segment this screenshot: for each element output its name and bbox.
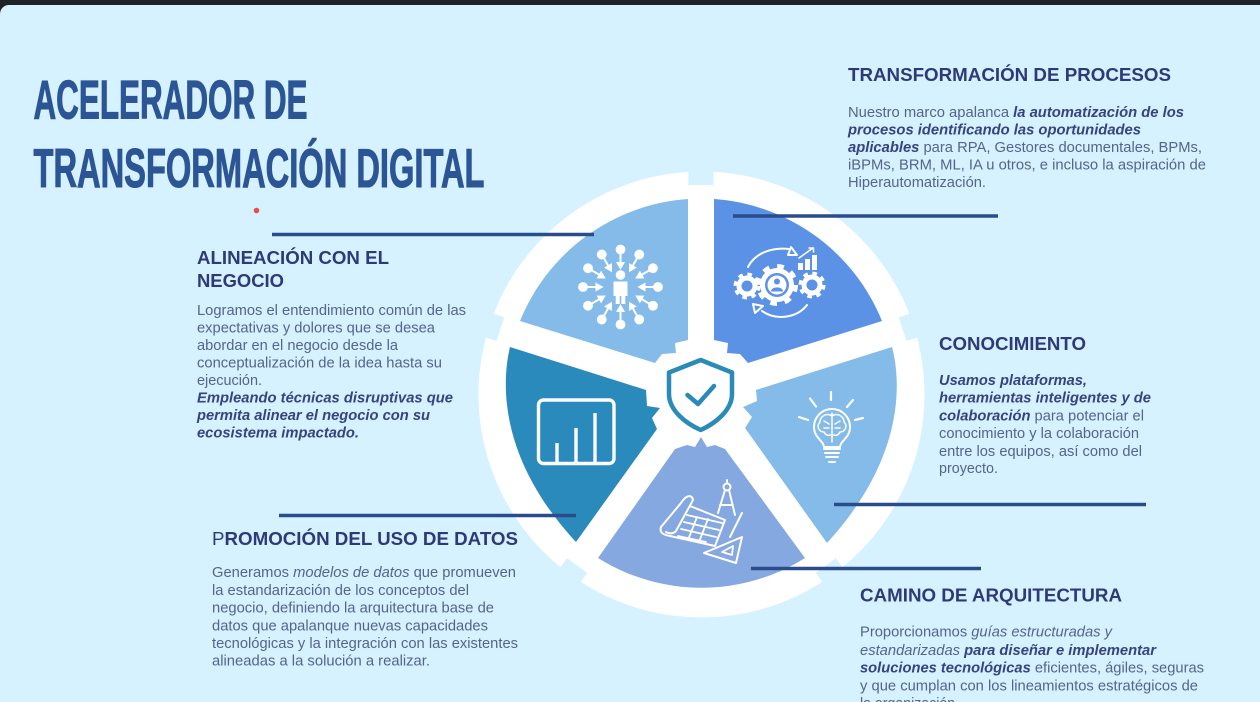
- segment: procesos: [714, 199, 882, 363]
- text block: conocimiento: herramientas inteligentes y de: [939, 391, 1151, 407]
- segment: arquitectura: [598, 437, 805, 588]
- icon: shield check: [669, 360, 732, 430]
- text block: transformación de procesos: Hiperautomatización.: [848, 175, 986, 191]
- segment: datos: [506, 347, 660, 542]
- text block: conocimiento: CONOCIMIENTO: [939, 334, 1086, 354]
- text block: alineación con el negocio: [196, 247, 466, 442]
- icon: blueprint with compass and set square: [661, 480, 742, 563]
- text block: conocimiento: conocimiento y la colaboración: [939, 426, 1139, 442]
- text block: transformación de procesos: procesos identificando las oportunidades: [847, 122, 1141, 138]
- text block: conocimiento: entre los equipos, así como del: [939, 444, 1142, 460]
- text block: transformación de procesos: iBPMs, BRM, ML, IA u otros, e incluso la aspiración de: [848, 158, 1206, 174]
- text block: camino de arquitectura: estandarizadas para diseñar e implementar: [860, 643, 1157, 659]
- text block: promoción del uso de datos: [212, 528, 518, 670]
- text block: camino de arquitectura: soluciones tecnológicas eficientes, ágiles, seguras: [860, 661, 1204, 677]
- icon: light bulb with brain: [799, 392, 863, 462]
- text block: alineación con el negocio: ecosistema impactado.: [197, 426, 359, 442]
- text block: conocimiento: Usamos plataformas,: [939, 373, 1087, 389]
- text block: camino de arquitectura: y que cumplan con los lineamientos estratégicos de: [860, 679, 1198, 695]
- text block: promoción del uso de datos: negocio, definiendo la arquitectura base de: [212, 601, 494, 617]
- text block: alineación con el negocio: expectativas y dolores que se desea: [197, 321, 436, 337]
- text block: alineación con el negocio: Empleando técnicas disruptivas que: [197, 390, 453, 406]
- text block: alineación con el negocio: conceptualización de la idea hasta su: [197, 356, 442, 372]
- text block: promoción del uso de datos: Generamos modelos de datos que promueven: [212, 565, 516, 581]
- text block: alineación con el negocio: Logramos el entendimiento común de las: [197, 303, 466, 319]
- icon: person with converging arrows: [578, 245, 663, 329]
- leader line: datos: [279, 514, 576, 517]
- text block: alineación con el negocio: abordar en el negocio desde la: [197, 338, 399, 354]
- segment: conocimiento: [743, 347, 897, 543]
- title: TRANSFORMACIÓN DIGITAL: [34, 137, 484, 199]
- text block: camino de arquitectura: Proporcionamos guías estructuradas y: [860, 625, 1113, 641]
- text block: alineación con el negocio: ALINEACIÓN CON EL: [197, 247, 389, 268]
- text block: transformación de procesos: [847, 64, 1206, 191]
- text block: transformación de procesos: TRANSFORMACIÓN DE PROCESOS: [848, 64, 1171, 85]
- icon: bar chart frame: [538, 400, 614, 464]
- text block: promoción del uso de datos: la estandarización de los conceptos del: [212, 583, 469, 599]
- title: [34, 68, 484, 199]
- text block: transformación de procesos: Nuestro marco apalanca la automatización de los: [848, 105, 1184, 121]
- segment: alineación: [520, 199, 688, 363]
- icon: gears with cycle arrows: [736, 247, 823, 317]
- text block: transformación de procesos: aplicables para RPA, Gestores documentales, BPMs,: [848, 140, 1202, 156]
- leader line: procesos: [733, 214, 998, 218]
- text block: alineación con el negocio: ejecución.: [197, 373, 262, 389]
- text block: conocimiento: [939, 334, 1151, 477]
- text block: promoción del uso de datos: alineadas a la solución a realizar.: [212, 654, 430, 670]
- leader line: conocimiento: [834, 503, 1146, 506]
- text block: camino de arquitectura: CAMINO DE ARQUITECTURA: [860, 586, 1122, 606]
- red pointer dot: [254, 208, 259, 213]
- wheel diagram: [478, 170, 924, 618]
- text block: alineación con el negocio: permita alinear el negocio con su: [196, 408, 430, 424]
- leader line: alineación: [272, 233, 594, 236]
- text block: conocimiento: proyecto.: [939, 461, 998, 477]
- text block: conocimiento: colaboración para potenciar el: [939, 408, 1144, 424]
- text block: promoción del uso de datos: datos que apalanque nuevas capacidades: [212, 618, 488, 634]
- title: ACELERADOR DE: [34, 68, 308, 130]
- text block: promoción del uso de datos: PROMOCIÓN DEL USO DE DATOS: [212, 528, 518, 549]
- text block: alineación con el negocio: NEGOCIO: [197, 271, 284, 291]
- text block: promoción del uso de datos: tecnológicas y la integración con las existentes: [212, 636, 518, 652]
- leader line: arquitectura: [751, 567, 981, 570]
- text block: camino de arquitectura: [860, 586, 1204, 702]
- outer white ring: [478, 172, 924, 618]
